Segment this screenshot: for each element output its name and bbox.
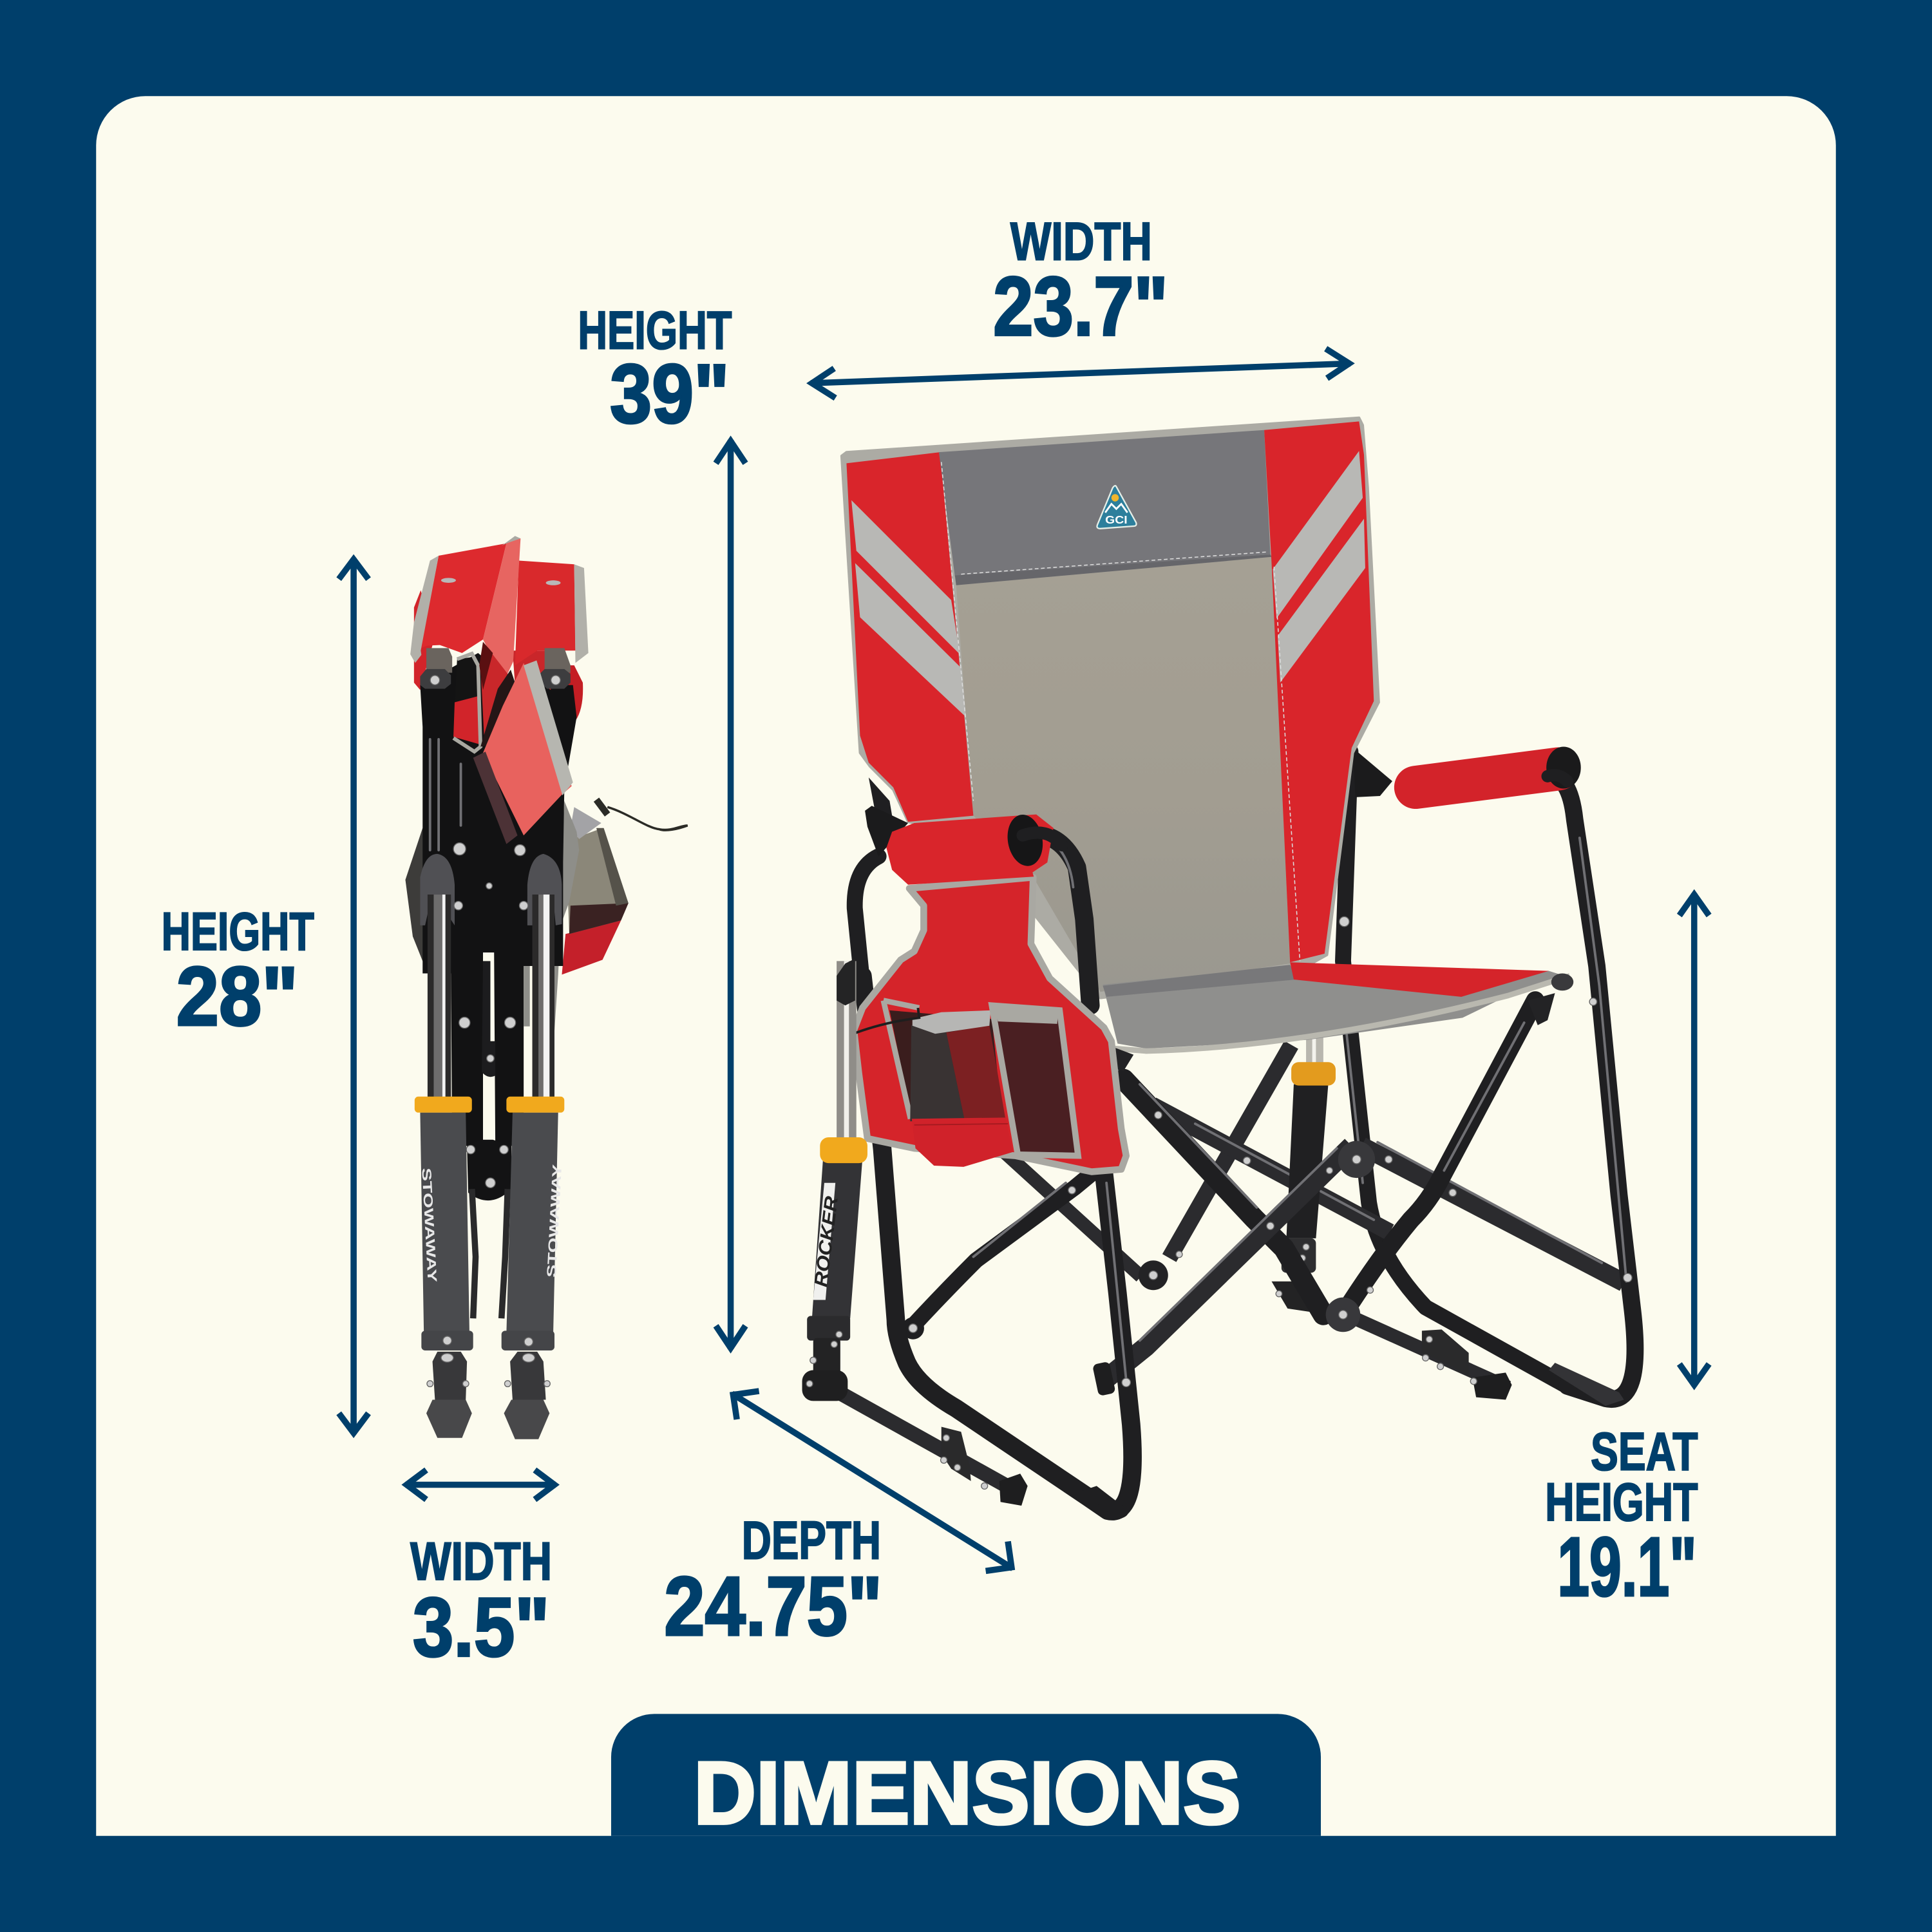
chair: left foot bar [826, 1385, 1018, 1492]
chair: side knob [837, 959, 855, 1005]
folded chair: centre strut and hinge disc [482, 961, 495, 1077]
chair: left arm roll black cap [1003, 812, 1046, 869]
chair: right back post bolt [1340, 916, 1349, 927]
folded chair [405, 536, 688, 1439]
chair: mesh back panel [956, 557, 1290, 992]
folded chair: left stowaway label: STOWAWAY [419, 1168, 439, 1283]
title text: DIMENSIONS [694, 1744, 1241, 1843]
folded chair: feet [426, 1352, 550, 1439]
folded chair: hinge caps [426, 648, 452, 673]
icon: GCI logo badge [1097, 486, 1137, 529]
title tab [611, 1714, 1321, 1843]
folded chair: frame bolts [453, 843, 528, 1188]
folded chair: rear gray bag [405, 828, 444, 973]
chair: right reflective stripes [1273, 451, 1365, 683]
label: seat height [1545, 1422, 1698, 1614]
chair: right foot block [1422, 1329, 1512, 1399]
label: folded height [162, 902, 314, 1043]
folded chair: gray clips [420, 854, 455, 925]
label: seat height: SEAT [1591, 1422, 1698, 1482]
chair: upper gray back panel [939, 430, 1271, 576]
chair: right arm roll [1416, 746, 1581, 788]
arrow: folded width [405, 1470, 556, 1499]
folded chair: side bag [551, 800, 688, 1050]
chair: left foot block [941, 1427, 1028, 1506]
main rocking chair [802, 418, 1635, 1519]
chair: left reflective stripes [851, 500, 966, 717]
folded chair: pink flap and strap [483, 663, 572, 835]
chair: rear frame leg and rocker [1004, 752, 1567, 1387]
chair: seat knob [1114, 1047, 1133, 1071]
label: folded height: 28" [176, 949, 298, 1043]
chair: right arm bracket [1353, 748, 1392, 797]
chair: crossing struts [902, 1001, 1624, 1396]
chair: arm tube end [1023, 833, 1062, 845]
folded chair: central black frame [420, 653, 576, 1146]
chair: pocket top strip [993, 1005, 1058, 1024]
arrow: chair width [811, 348, 1350, 398]
folded chair: left tube highlights [430, 739, 461, 850]
folded chair: red top flaps [410, 536, 589, 690]
folded chair: chrome rods [428, 895, 451, 1099]
chair: front arm tube [1023, 834, 1090, 1005]
label: chair depth [664, 1510, 882, 1653]
chair: seat [1103, 962, 1573, 1051]
label: seat height: 19.1" [1557, 1520, 1697, 1614]
label: seat height: HEIGHT [1545, 1472, 1698, 1532]
label: chair width: WIDTH [1010, 212, 1152, 272]
folded chair: right stowaway label: STOWAWAY [545, 1163, 565, 1278]
chair: right arm frame tube [1548, 776, 1635, 1406]
chair: left upper tube [855, 857, 878, 986]
chair: drink pocket [884, 1001, 1013, 1167]
label: chair depth: 24.75" [664, 1559, 882, 1653]
label: chair height [578, 300, 732, 440]
chair: left post and rocker tube [862, 976, 1133, 1519]
arrow: chair height [716, 440, 746, 1349]
chair: pocket cord [840, 1008, 919, 1037]
icon: GCI logo badge: GCI [1105, 513, 1128, 526]
chair: lower gray band [955, 554, 1271, 585]
label: chair width: 23.7" [993, 259, 1168, 353]
chair: rear shock absorber [1271, 1036, 1336, 1314]
folded chair: inner folded flap [453, 642, 515, 752]
chair: rear-left back post [869, 777, 893, 823]
label: folded width: 3.5" [413, 1580, 549, 1674]
folded chair: left red ear [414, 590, 433, 690]
folded chair: lower struts [472, 1189, 507, 1318]
chair: stitching [942, 462, 1300, 961]
chair: right red side panel [1264, 421, 1374, 962]
chair: left red side panel [846, 452, 973, 822]
arrow: chair depth [732, 1391, 1013, 1571]
label: chair height: HEIGHT [578, 300, 732, 360]
label: chair height: 39" [610, 346, 730, 440]
folded chair: right red ear [554, 665, 583, 727]
label: chair width [993, 212, 1168, 353]
arrow: seat height [1680, 893, 1709, 1386]
folded chair: webbing tabs [524, 966, 530, 1027]
chair: front shock absorber [802, 961, 867, 1401]
folded chair: sleeves [420, 1113, 469, 1333]
folded chair: yellow caps [415, 1097, 472, 1113]
chair: left arm roll [886, 815, 1054, 885]
chair: arm tube highlight [1047, 838, 1073, 887]
label: folded width [410, 1531, 552, 1674]
folded chair: collars [421, 1331, 473, 1350]
chair: rocker label: ROCKER [811, 1195, 842, 1288]
label: folded height: HEIGHT [162, 902, 314, 961]
label: chair depth: DEPTH [742, 1510, 881, 1570]
chair: side panel [854, 877, 1126, 1172]
arrow: folded height [339, 558, 368, 1434]
chair: left bracket [865, 806, 908, 857]
folded chair: lower hinge [467, 1140, 511, 1200]
chair: flat mesh pocket [992, 1005, 1078, 1156]
chair: back fabric binding [842, 418, 1379, 998]
label: folded width: WIDTH [410, 1531, 552, 1591]
